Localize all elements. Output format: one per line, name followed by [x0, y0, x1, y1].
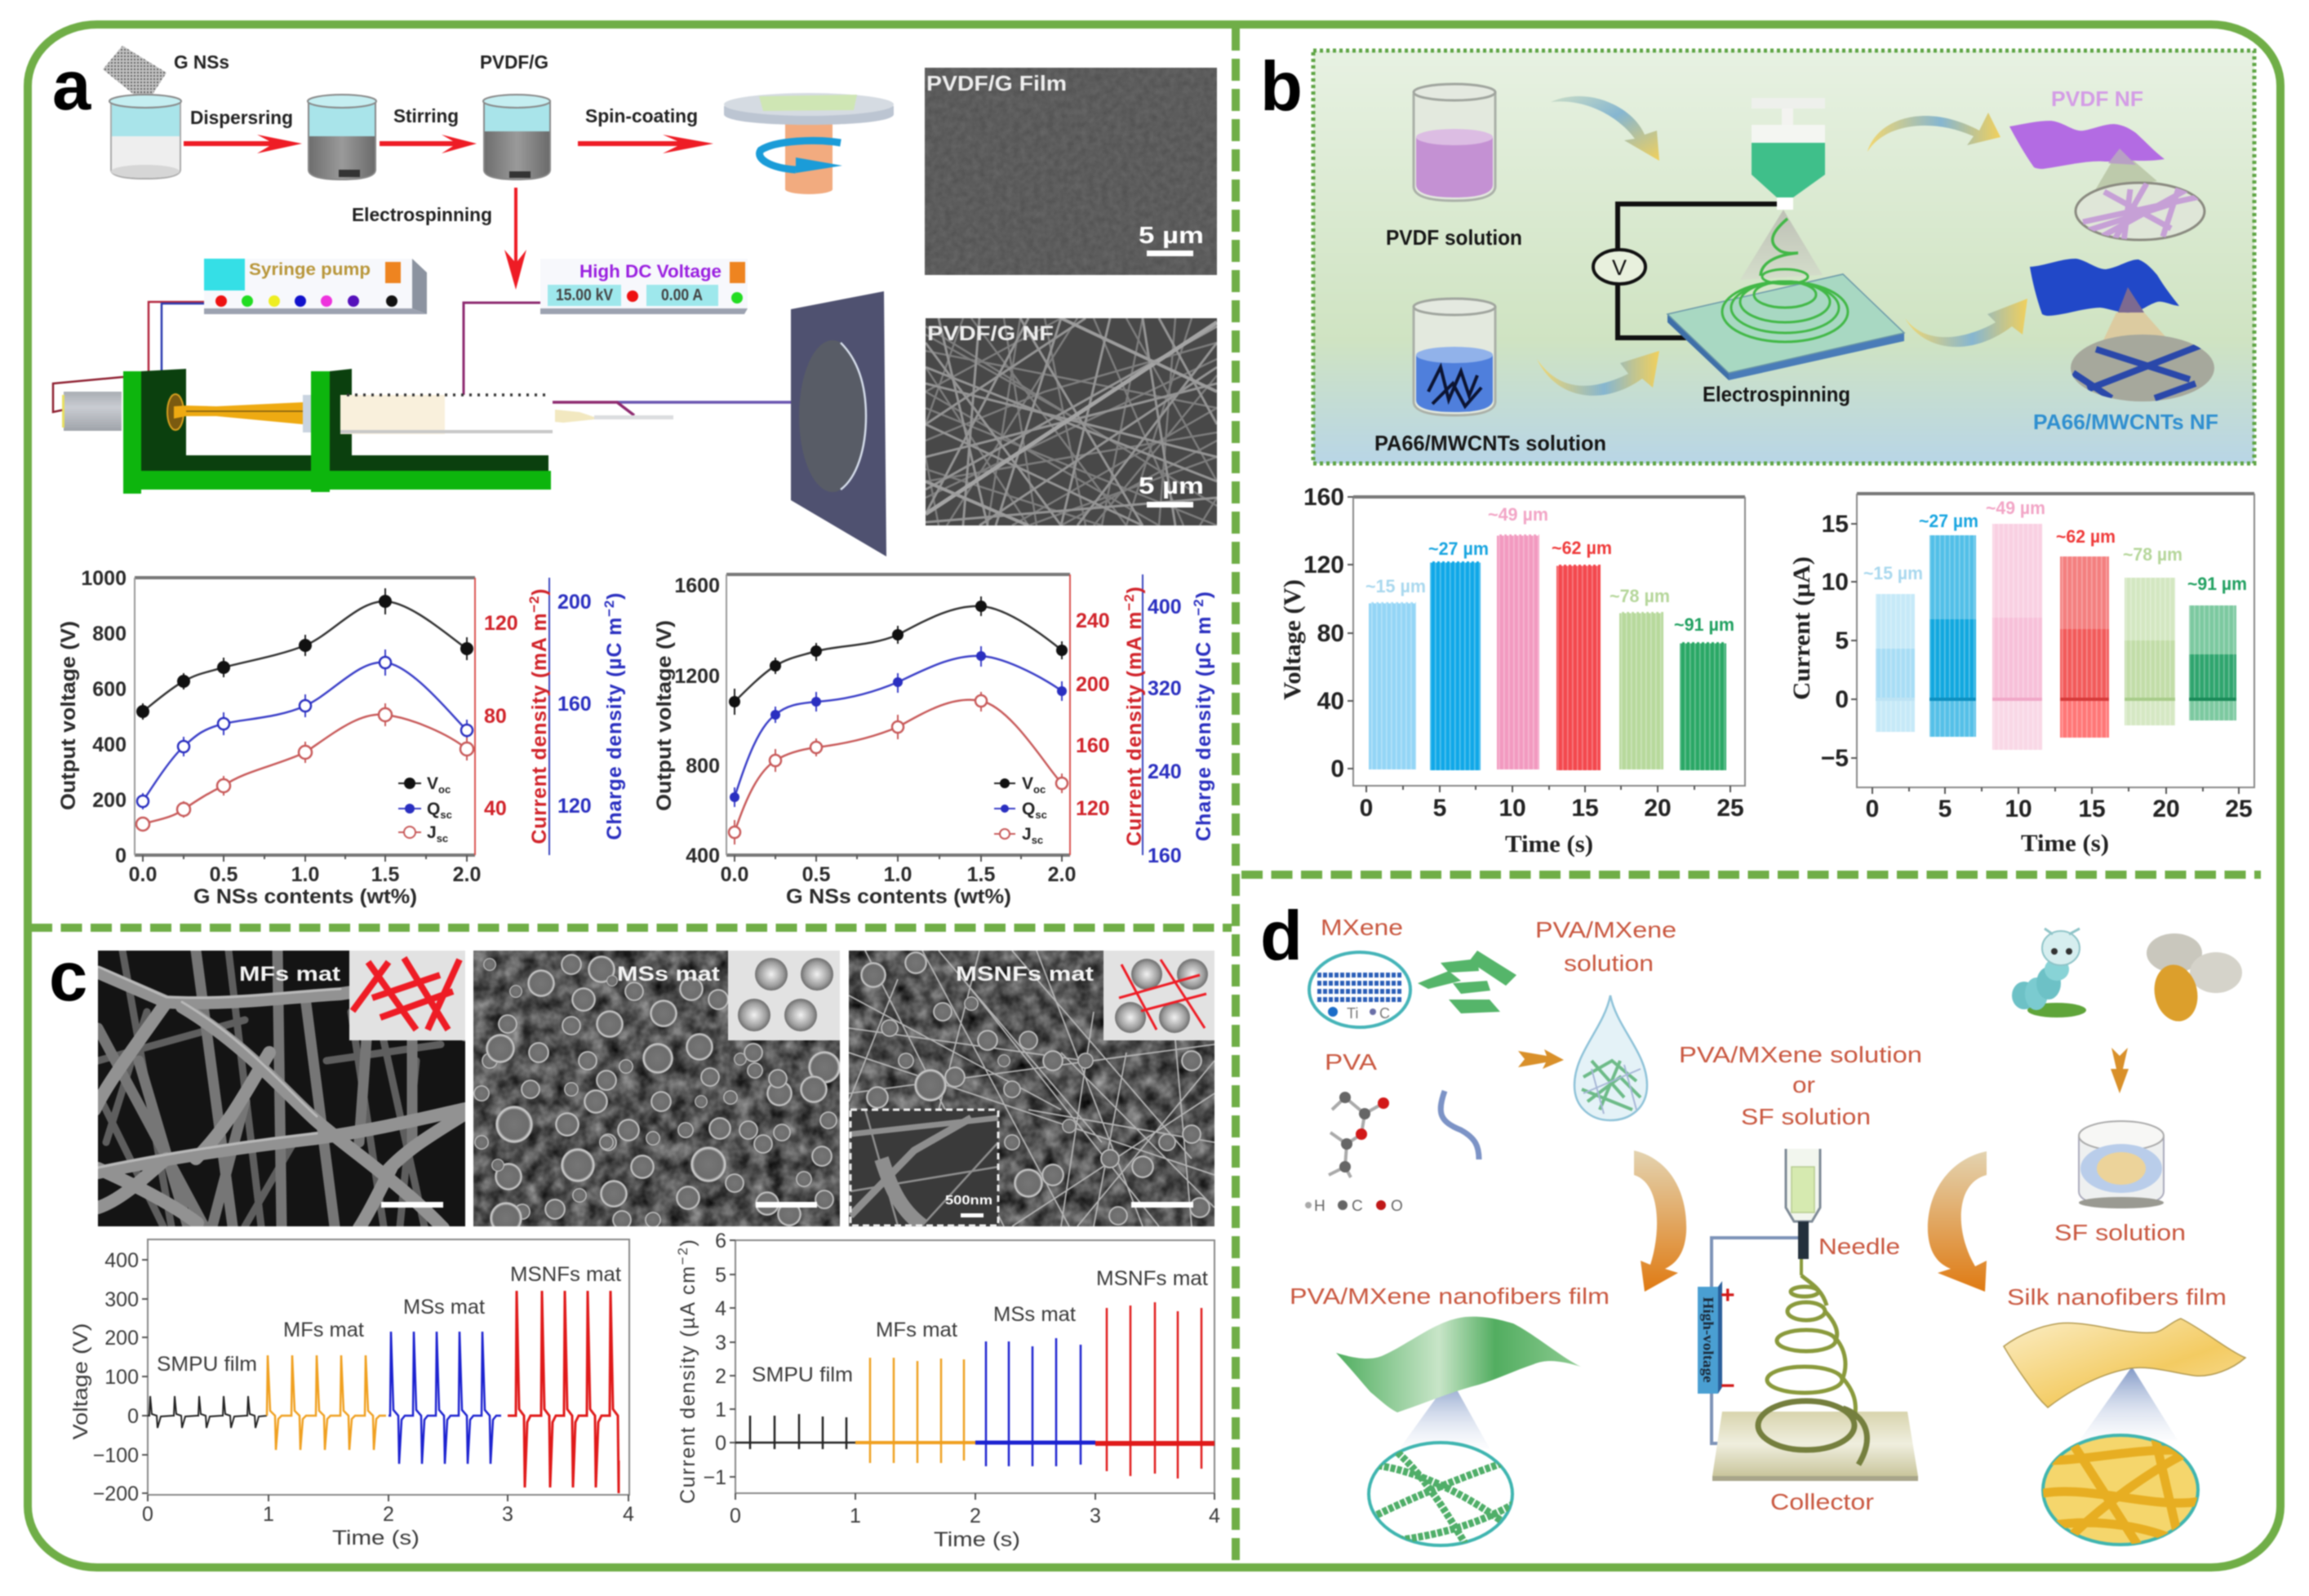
beaker 2 — [308, 95, 376, 180]
schematic labels — [1374, 86, 2218, 455]
chart: output vs G NSs content, right — [653, 574, 1215, 908]
SEM image: MFs mat: MFs mat — [239, 963, 341, 986]
chart: output vs G NSs content, right: Current density (mA m — [1123, 612, 1146, 846]
beaker 1 — [109, 95, 181, 179]
orange text labels: Collector — [1770, 1489, 1874, 1514]
chart: voltage vs time by thickness: 5 — [1433, 795, 1446, 822]
high-voltage circuit: High-voltage — [1700, 1297, 1716, 1383]
chart: current vs time by thickness: 0 — [1835, 686, 1849, 713]
SEM image: PVDF/G nanofibers — [926, 318, 1217, 525]
chart: voltage vs time: Time (s) — [332, 1527, 420, 1549]
chart: voltage vs time: 100 — [104, 1366, 139, 1389]
chart: voltage vs time: Voltage (V) — [69, 1323, 92, 1439]
chart: output vs G NSs content, right: oc — [1033, 783, 1046, 796]
chart: voltage vs time by thickness: 25 — [1716, 795, 1744, 822]
PVDF nanofiber film — [2009, 121, 2205, 242]
chart: output vs G NSs content, left: 1.0 — [291, 863, 319, 886]
SEM image: PVDF/G film — [925, 68, 1217, 275]
chart: output vs G NSs content, left: 400 — [92, 734, 127, 756]
chart: output vs G NSs content, right: 1.5 — [967, 863, 995, 886]
PA66/MWCNTs nanofiber film — [2030, 259, 2214, 401]
chart: voltage vs time by thickness: 15 — [1571, 795, 1599, 822]
chart: output vs G NSs content, left: Charge density (µC m — [603, 618, 626, 840]
chart: current vs time by thickness: 5 — [1938, 796, 1952, 822]
chart: output vs G NSs content, right: 160 — [1076, 734, 1110, 757]
chart: current density vs time: 5 — [715, 1264, 726, 1287]
process labels: PVDF/G — [480, 51, 548, 73]
collector plate — [1712, 1412, 1918, 1481]
chart: current density vs time — [675, 1230, 1220, 1551]
atom legend — [1305, 1198, 1403, 1215]
chart: current density vs time: Current density (µA cm — [677, 1266, 699, 1504]
beaker 3 — [483, 95, 550, 180]
process labels — [174, 51, 698, 225]
chart: output vs G NSs content, right: 1600 — [674, 574, 720, 597]
panel b — [1260, 48, 2254, 858]
chart: output vs G NSs content, right: ) — [1192, 592, 1215, 598]
chart: output vs G NSs content, left: 0.0 — [129, 863, 157, 886]
chart: output vs G NSs content, right: 1.0 — [884, 863, 912, 886]
electrospinning syringe — [1752, 98, 1825, 210]
chart: current vs time by thickness: Time (s) — [2021, 830, 2109, 857]
orange text labels: PVA/MXene nanofibers film — [1290, 1283, 1610, 1309]
chart: output vs G NSs content, left: 0.5 — [210, 863, 238, 886]
chart: output vs G NSs content, left: 120 — [484, 612, 518, 635]
PVA chain — [1441, 1091, 1479, 1159]
chart: output vs G NSs content, right: 2.0 — [1048, 863, 1076, 886]
chart: output vs G NSs content, left: 200 — [557, 591, 592, 614]
icon: graphene nanosheet — [103, 46, 167, 104]
high DC voltage box: High DC Voltage — [579, 261, 722, 282]
chart: output vs G NSs content, left: 80 — [484, 705, 507, 728]
chart: voltage vs time by thickness: ~15 µm — [1365, 576, 1426, 596]
chart: current vs time by thickness: 15 — [2078, 796, 2106, 822]
chart: output vs G NSs content, right: 400 — [1148, 596, 1182, 618]
chart: voltage vs time by thickness: 10 — [1499, 795, 1526, 822]
chart: output vs G NSs content, left: G NSs contents (wt%) — [193, 885, 417, 908]
chart: output vs G NSs content, left: −2 — [602, 601, 617, 617]
chart: voltage vs time by thickness: ~49 µm — [1488, 504, 1548, 525]
chart: current vs time by thickness: ~62 µm — [2056, 526, 2116, 547]
orange text labels: Silk nanofibers film — [2007, 1284, 2227, 1310]
chart: current density vs time: Time (s) — [934, 1528, 1020, 1551]
schematic background box — [1313, 51, 2254, 463]
orange text labels: PVA/MXene — [1535, 917, 1676, 942]
chart: voltage vs time: 3 — [502, 1503, 513, 1526]
chart: current vs time by thickness: ~78 µm — [2123, 544, 2182, 565]
panel c — [49, 938, 1220, 1551]
atom legend: O — [1391, 1198, 1403, 1215]
chart: output vs G NSs content, left: 120 — [557, 795, 592, 818]
MXene crystal circle: C — [1379, 1005, 1390, 1022]
chart: voltage vs time: 300 — [104, 1288, 139, 1311]
atom legend: H — [1314, 1198, 1325, 1215]
chart: current vs time by thickness: ~49 µm — [1986, 498, 2045, 518]
chart: output vs G NSs content, right: 160 — [1148, 845, 1182, 867]
chart: current density vs time: MFs mat — [876, 1319, 957, 1341]
MXene crystal circle — [1309, 952, 1410, 1027]
arrow to droplet — [1518, 1049, 1564, 1069]
droplet of PVA/MXene solution — [1574, 995, 1647, 1120]
orange text labels: Needle — [1818, 1234, 1900, 1259]
chart: voltage vs time: SMPU film — [157, 1353, 257, 1376]
chart: voltage vs time: −100 — [93, 1444, 139, 1467]
orange text labels: MXene — [1321, 915, 1403, 940]
high-voltage circuit: − — [1721, 1372, 1735, 1399]
chart: output vs G NSs content, left: 160 — [557, 693, 592, 716]
vial: PVDF solution — [1414, 84, 1495, 201]
chart: voltage vs time by thickness: Time (s) — [1505, 831, 1593, 858]
chart: output vs G NSs content, right: −2 — [1121, 594, 1137, 611]
chart: output vs G NSs content, left: 0 — [115, 845, 127, 867]
chart: output vs G NSs content, left: ) — [603, 592, 626, 600]
process labels: Dispersring — [190, 107, 293, 128]
chart: output vs G NSs content, right: Charge density (µC m — [1192, 617, 1215, 841]
chart: output vs G NSs content, left: −2 — [526, 596, 542, 613]
chart: current vs time by thickness: ~15 µm — [1863, 563, 1923, 583]
small downward arrow — [2111, 1048, 2129, 1093]
schematic labels: PA66/MWCNTs NF — [2033, 410, 2218, 434]
chart: voltage vs time by thickness: ~78 µm — [1610, 586, 1670, 606]
voltage circuit — [1593, 204, 1777, 338]
chart: current vs time by thickness: 10 — [2005, 796, 2032, 822]
chart: output vs G NSs content, left: 600 — [92, 678, 127, 701]
chart: output vs G NSs content, right: 400 — [686, 845, 720, 867]
chart: current vs time by thickness — [1788, 494, 2254, 857]
chart: output vs G NSs content, left: V — [427, 774, 438, 793]
SEM image: MSNFs mat — [849, 951, 1214, 1226]
chart: output vs G NSs content, right: 0.5 — [802, 863, 830, 886]
chart: voltage vs time by thickness: 20 — [1644, 795, 1672, 822]
chart: current density vs time: 0 — [715, 1432, 726, 1455]
chart: output vs G NSs content, right: ) — [1123, 587, 1146, 593]
chart: current vs time by thickness: Current (µA) — [1788, 556, 1815, 700]
MXene flakes — [1418, 951, 1516, 1013]
chart: current density vs time: 2 — [970, 1505, 981, 1527]
process labels: Spin-coating — [585, 105, 698, 126]
chart: voltage vs time: 200 — [104, 1327, 139, 1350]
chart: current density vs time: −2 — [675, 1248, 690, 1265]
chart: current density vs time: 4 — [1209, 1505, 1220, 1527]
SEM image: PVDF/G nanofibers: PVDF/G NF — [927, 322, 1054, 345]
chart: current vs time by thickness: 20 — [2152, 796, 2180, 822]
chart: output vs G NSs content, right: sc — [1035, 809, 1047, 821]
chart: voltage vs time: 0 — [142, 1503, 153, 1526]
schematic labels: PVDF NF — [2051, 86, 2143, 111]
chart: output vs G NSs content, right: 200 — [1076, 673, 1110, 696]
schematic labels: Electrospinning — [1703, 382, 1850, 406]
chart: output vs G NSs content, right: 240 — [1076, 610, 1110, 632]
chart: output vs G NSs content, right: 800 — [686, 755, 720, 778]
chart: voltage vs time by thickness — [1279, 484, 1745, 858]
chart: voltage vs time by thickness: 0 — [1360, 795, 1373, 822]
label d: d — [1260, 898, 1303, 975]
chart: output vs G NSs content, right: G NSs contents (wt%) — [786, 885, 1011, 908]
PVA/MXene nanofiber film — [1336, 1317, 1581, 1550]
SEM image: MSs mat — [473, 951, 841, 1235]
SEM image: PVDF/G film: PVDF/G Film — [926, 71, 1067, 95]
orange text labels: SF solution — [2054, 1220, 2186, 1245]
chart: current vs time by thickness: 15 — [1822, 511, 1849, 538]
chart: voltage vs time: 4 — [623, 1503, 634, 1526]
collector plate — [791, 291, 886, 556]
chart: current density vs time: SMPU film — [752, 1363, 853, 1386]
right curved orange arrow — [1928, 1151, 1987, 1292]
SEM image: MFs mat — [95, 951, 465, 1228]
process labels: G NSs — [174, 51, 229, 73]
chart: voltage vs time: 2 — [383, 1503, 394, 1526]
chart: output vs G NSs content, right: 1200 — [674, 665, 720, 688]
chart: voltage vs time by thickness: 0 — [1330, 756, 1344, 782]
red process arrows — [184, 135, 713, 290]
chart: output vs G NSs content, left: 1000 — [81, 567, 127, 590]
label b: b — [1260, 48, 1303, 126]
chart: current vs time by thickness: 25 — [2225, 796, 2253, 822]
chart: output vs G NSs content, right: 320 — [1148, 677, 1182, 700]
spin coater — [724, 93, 894, 194]
schematic labels: PVDF solution — [1386, 225, 1522, 250]
chart: output vs G NSs content, right: J — [1022, 825, 1032, 844]
chart: voltage vs time by thickness: 80 — [1317, 620, 1344, 647]
MXene crystal circle: Ti — [1347, 1005, 1358, 1022]
chart: output vs G NSs content, left: sc — [440, 809, 452, 821]
chart: current vs time by thickness: −5 — [1821, 745, 1849, 772]
chart: output vs G NSs content, right: −2 — [1191, 599, 1206, 616]
chart: current vs time by thickness: 5 — [1835, 627, 1849, 654]
chart: voltage vs time by thickness: ~62 µm — [1552, 538, 1612, 558]
chart: output vs G NSs content, left: 1.5 — [371, 863, 399, 886]
chart: voltage vs time: 400 — [104, 1249, 139, 1272]
high-voltage circuit: + — [1721, 1282, 1735, 1309]
chart: voltage vs time: MSs mat — [403, 1296, 485, 1319]
label a: a — [52, 47, 91, 125]
panel d — [1260, 898, 2245, 1550]
syringe pump box: Syringe pump — [249, 260, 371, 279]
voltage circuit: V — [1612, 255, 1627, 280]
chart: output vs G NSs content, left: 40 — [484, 797, 507, 820]
chart: voltage vs time: −200 — [93, 1483, 139, 1505]
orange text labels: PVA — [1325, 1049, 1377, 1075]
chart: current vs time by thickness: ~91 µm — [2187, 574, 2247, 594]
syringe pump box — [204, 259, 427, 314]
chart: current density vs time: −1 — [703, 1466, 726, 1489]
chart: output vs G NSs content, left: 2.0 — [453, 863, 481, 886]
chart: output vs G NSs content, left: oc — [438, 783, 451, 796]
flow arrows — [1537, 96, 2027, 396]
wires — [53, 302, 791, 415]
chart: output vs G NSs content, right: 240 — [1148, 760, 1182, 783]
chart: voltage vs time: MFs mat — [283, 1319, 364, 1341]
high DC voltage box: 0.00 A — [661, 286, 703, 304]
silk nanofiber film — [2004, 1319, 2245, 1550]
collector and spinning cone — [1667, 210, 1904, 380]
orange text labels: solution — [1564, 951, 1654, 976]
orange text labels: or — [1792, 1072, 1815, 1097]
orange text labels — [1290, 915, 2227, 1514]
chart: output vs G NSs content, right: 0.0 — [721, 863, 748, 886]
chart: current density vs time: 3 — [715, 1332, 726, 1354]
chart: current vs time by thickness: ~27 µm — [1919, 511, 1978, 531]
caterpillar — [2012, 929, 2086, 1017]
chart: output vs G NSs content, right: V — [1022, 774, 1033, 793]
panel a — [52, 46, 1217, 908]
orange text labels: SF solution — [1741, 1104, 1871, 1129]
chart: current density vs time: 1 — [850, 1505, 861, 1527]
chart: output vs G NSs content, right: sc — [1032, 834, 1043, 846]
chart: output vs G NSs content, left: sc — [437, 832, 448, 845]
chart: voltage vs time by thickness: 160 — [1303, 484, 1344, 511]
chart: voltage vs time by thickness: ~27 µm — [1428, 539, 1489, 559]
chart: output vs G NSs content, left: 200 — [92, 789, 127, 812]
chart: current density vs time: ) — [677, 1239, 699, 1246]
chart: voltage vs time: MSNFs mat — [510, 1263, 621, 1286]
chart: voltage vs time by thickness: ~91 µm — [1674, 614, 1734, 635]
chart: output vs G NSs content, left — [57, 567, 626, 908]
chart: output vs G NSs content, left: 800 — [92, 623, 127, 645]
chart: current density vs time: 1 — [715, 1399, 726, 1421]
SEM image: MSs mat: MSs mat — [617, 963, 721, 986]
process labels: Electrospinning — [352, 204, 492, 225]
PVA molecule — [1329, 1092, 1389, 1177]
orange text labels: PVA/MXene solution — [1679, 1042, 1922, 1067]
electrospinning setup stand and syringe — [62, 369, 673, 494]
chart: output vs G NSs content, right: Output voltage (V) — [653, 620, 676, 811]
chart: current density vs time: 6 — [715, 1230, 726, 1252]
SEM image: PVDF/G nanofibers: 5 µm — [1139, 473, 1204, 499]
chart: current density vs time: 2 — [715, 1365, 726, 1388]
chart: output vs G NSs content, left: J — [427, 823, 437, 842]
SF solution beaker — [2079, 1121, 2164, 1208]
chart: output vs G NSs content, left: ) — [528, 589, 551, 596]
high DC voltage box: 15.00 kV — [556, 286, 614, 304]
chart: output vs G NSs content, right: Q — [1022, 800, 1035, 818]
chart: voltage vs time by thickness: 40 — [1317, 688, 1344, 715]
left curved orange arrow — [1634, 1150, 1686, 1292]
high-voltage circuit — [1698, 1238, 1798, 1443]
chart: current density vs time: 0 — [730, 1505, 741, 1527]
chart: output vs G NSs content, left: Q — [427, 800, 440, 818]
chart: current density vs time: MSs mat — [993, 1303, 1076, 1326]
chart: output vs G NSs content, right: 120 — [1076, 797, 1110, 820]
chart: voltage vs time: 0 — [127, 1405, 139, 1428]
chart: current density vs time: 3 — [1090, 1505, 1101, 1527]
schematic labels: PA66/MWCNTs solution — [1374, 431, 1606, 455]
chart: voltage vs time — [69, 1239, 634, 1549]
chart: voltage vs time by thickness: 120 — [1303, 552, 1344, 579]
chart: voltage vs time by thickness: Voltage (V) — [1279, 579, 1306, 700]
needle — [1786, 1149, 1820, 1275]
cocoons — [2147, 933, 2242, 1026]
vial: PA66/MWCNTs solution — [1414, 299, 1495, 415]
atom legend: C — [1352, 1198, 1363, 1215]
label c: c — [49, 938, 87, 1016]
chart: current density vs time: 4 — [715, 1297, 726, 1320]
SEM image: MSNFs mat: 500nm — [945, 1194, 992, 1208]
process labels: Stirring — [393, 105, 459, 126]
chart: output vs G NSs content, left: Current density (mA m — [528, 613, 551, 844]
SEM image: MSNFs mat: MSNFs mat — [956, 963, 1095, 986]
chart: output vs G NSs content, left: Output voltage (V) — [57, 621, 80, 810]
high DC voltage box — [540, 259, 748, 314]
chart: current vs time by thickness: 10 — [1822, 569, 1849, 596]
chart: current vs time by thickness: 0 — [1866, 796, 1879, 822]
chart: voltage vs time: 1 — [263, 1503, 274, 1526]
chart: current density vs time: MSNFs mat — [1096, 1267, 1208, 1290]
SEM image: PVDF/G film: 5 µm — [1139, 223, 1204, 249]
fiber whipping spiral — [1758, 1275, 1867, 1465]
